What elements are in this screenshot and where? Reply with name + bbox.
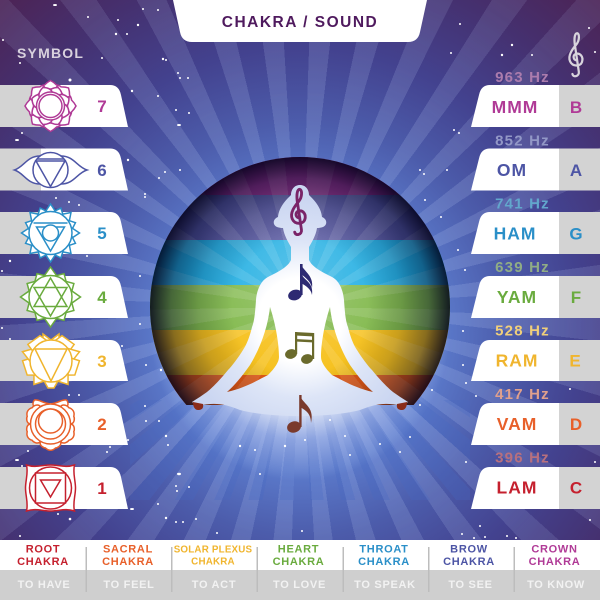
frequency row E: 528 Hz bbox=[495, 322, 550, 340]
frequency row E: E bbox=[569, 352, 581, 370]
brow column: TO SEE bbox=[448, 579, 493, 591]
icon: sacral chakra bbox=[23, 400, 78, 450]
icon: sixteenth note bbox=[287, 264, 312, 302]
icon: treble clef corner bbox=[569, 33, 582, 76]
crown column bbox=[527, 544, 585, 591]
icon: eighth note bbox=[286, 395, 312, 434]
row 2 left: 2 bbox=[97, 415, 107, 434]
brow column bbox=[443, 544, 495, 591]
frequency row A: 852 Hz bbox=[495, 132, 550, 150]
root column: ROOT bbox=[26, 544, 60, 556]
heart column: CHAKRA bbox=[273, 556, 324, 568]
icon: right hand tip bbox=[397, 402, 407, 410]
row 4 left bbox=[0, 267, 128, 327]
bottom legend bbox=[0, 540, 600, 600]
frequency row C: 396 Hz bbox=[495, 450, 550, 466]
frequency row D: D bbox=[570, 415, 582, 434]
frequency row A: A bbox=[570, 161, 582, 180]
sacral column: CHAKRA bbox=[102, 556, 154, 568]
frequency row B: MMM bbox=[492, 97, 538, 117]
row 6 left: 6 bbox=[97, 161, 107, 180]
row 5 left bbox=[0, 204, 128, 262]
lower glow rays bbox=[130, 400, 470, 500]
frequency row B: B bbox=[570, 98, 582, 117]
frequency row C: LAM bbox=[497, 478, 537, 498]
row 7 left: 7 bbox=[97, 97, 107, 116]
icon: throat chakra bbox=[22, 204, 80, 262]
frequency row D bbox=[471, 386, 600, 445]
crown column: TO KNOW bbox=[527, 579, 585, 591]
icon: left hand tip bbox=[193, 402, 203, 410]
row 2 left bbox=[0, 400, 128, 450]
frequency row A bbox=[471, 132, 600, 190]
frequency row D: VAM bbox=[497, 414, 537, 434]
row 1 left bbox=[0, 465, 128, 511]
row 3 left: 3 bbox=[97, 352, 107, 371]
frequency row F: 639 Hz bbox=[495, 259, 550, 276]
frequency row G: HAM bbox=[494, 224, 536, 244]
root column bbox=[17, 544, 70, 591]
central glow bbox=[130, 180, 470, 500]
solar plexus column: SOLAR PLEXUS bbox=[174, 544, 253, 556]
heart column: TO LOVE bbox=[273, 579, 326, 591]
icon: solar plexus chakra bbox=[20, 334, 82, 389]
frequency row G bbox=[471, 196, 600, 254]
heart column bbox=[273, 544, 326, 591]
throat column: THROAT bbox=[359, 544, 409, 556]
frequency row E: RAM bbox=[496, 350, 538, 370]
crown column: CROWN bbox=[531, 544, 578, 556]
row 4 left: 4 bbox=[97, 288, 107, 307]
throat column bbox=[354, 544, 416, 591]
root column: CHAKRA bbox=[17, 556, 69, 568]
frequency row F bbox=[471, 259, 600, 318]
frequency row G: 741 Hz bbox=[495, 196, 550, 212]
frequency row D: 417 Hz bbox=[495, 386, 550, 403]
icon: crown chakra bbox=[25, 80, 76, 132]
icon: root chakra bbox=[26, 465, 76, 511]
solar plexus column: CHAKRA bbox=[191, 556, 235, 568]
solar plexus column: TO ACT bbox=[192, 579, 236, 591]
icon: heart chakra bbox=[20, 267, 80, 327]
frequency row G: G bbox=[569, 224, 583, 244]
frequency row F: YAM bbox=[497, 287, 537, 307]
icon: treble clef on head bbox=[292, 189, 305, 235]
brow column: CHAKRA bbox=[443, 556, 495, 568]
frequency row C bbox=[471, 450, 600, 509]
sacral column: TO FEEL bbox=[103, 579, 155, 591]
sacral column bbox=[102, 544, 155, 591]
symbol column heading: SYMBOL bbox=[17, 45, 84, 61]
frequency row C: C bbox=[570, 478, 582, 498]
frequency row A: OM bbox=[497, 160, 527, 180]
frequency row B bbox=[471, 69, 600, 127]
frequency row B: 963 Hz bbox=[495, 69, 550, 86]
throat column: TO SPEAK bbox=[354, 579, 416, 591]
sacral column: SACRAL bbox=[103, 544, 153, 556]
throat column: CHAKRA bbox=[358, 556, 410, 568]
crown column: CHAKRA bbox=[529, 556, 580, 568]
heart column: HEART bbox=[278, 544, 319, 556]
solar plexus column bbox=[174, 544, 253, 591]
row 1 left: 1 bbox=[97, 479, 107, 498]
chakra colour bands in circle bbox=[150, 157, 450, 405]
icon: beamed notes bbox=[284, 332, 314, 365]
root column: TO HAVE bbox=[18, 579, 70, 591]
title tab bbox=[173, 0, 427, 42]
frequency row F: F bbox=[571, 288, 581, 307]
icon: brow chakra bbox=[14, 152, 87, 188]
title tab: CHAKRA / SOUND bbox=[222, 14, 378, 31]
brow column: BROW bbox=[450, 544, 488, 556]
row 5 left: 5 bbox=[97, 224, 107, 243]
frequency row E bbox=[471, 322, 600, 381]
row 7 left bbox=[0, 80, 128, 132]
meditating body silhouette bbox=[192, 185, 408, 416]
row 3 left bbox=[0, 334, 128, 389]
row 6 left bbox=[0, 148, 128, 190]
